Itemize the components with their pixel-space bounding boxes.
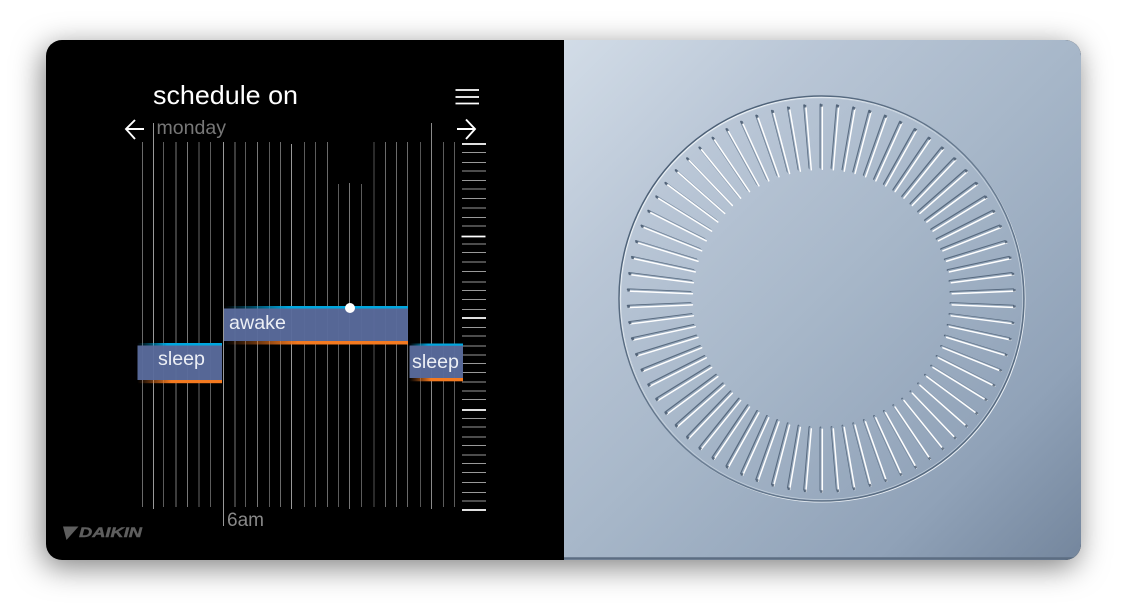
block: sleep evening: sleep [412, 351, 459, 373]
label: monday: monday [156, 117, 226, 139]
dial: embossed ring [619, 96, 1025, 502]
heading: schedule on: schedule on [153, 80, 298, 110]
panel: black schedule screen [63, 80, 486, 540]
card shadow and base [46, 40, 1081, 560]
icon: right arrow [457, 120, 475, 139]
vertical hour lines [142, 123, 454, 526]
right temperature ruler [462, 144, 486, 510]
label: 6am: 6am [227, 510, 264, 531]
dial grooves [628, 104, 1015, 492]
icon: left arrow [126, 120, 144, 139]
block: awake: awake [229, 312, 286, 334]
block: sleep evening [410, 344, 463, 381]
block: sleep morning [138, 343, 222, 383]
handle dot [345, 303, 355, 313]
icon: menu [456, 90, 479, 104]
logo: Daikin [63, 525, 142, 540]
device illustration [63, 40, 1081, 560]
block: sleep morning: sleep [158, 348, 205, 370]
panel: brushed metal control surface [564, 40, 1081, 560]
block: awake [224, 303, 408, 344]
logo: Daikin: DAIKIN [79, 525, 142, 540]
panel edge shading [564, 557, 1081, 560]
dial rim [619, 96, 1025, 502]
